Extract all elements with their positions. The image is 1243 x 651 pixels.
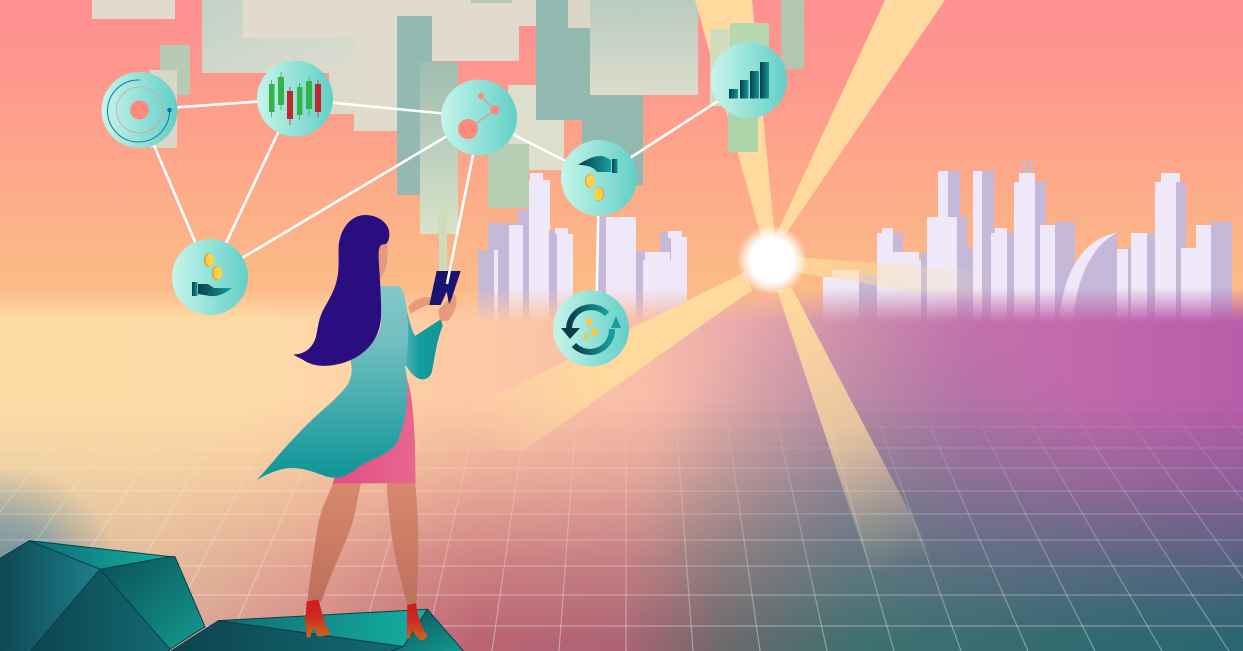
sleeve — [397, 293, 443, 379]
connector line from network node to phone — [447, 155, 473, 284]
light rays going upward from the sun — [695, 0, 945, 240]
left rock — [0, 541, 205, 651]
rock under her feet — [170, 609, 464, 651]
coat — [257, 286, 408, 480]
legs — [307, 482, 418, 607]
city skyline: right — [823, 160, 1232, 325]
city skyline: left — [478, 173, 687, 325]
blocks in front of the ray — [710, 23, 769, 152]
ray to the right across the city — [795, 257, 1000, 306]
background abstract blocks — [92, 0, 804, 275]
node: candlestick chart icon — [257, 60, 333, 136]
sky background — [0, 0, 1243, 340]
face — [378, 243, 387, 278]
node: share network icon — [441, 80, 517, 156]
ground gradient — [0, 280, 1243, 651]
node: hand dropping coins icon — [561, 140, 637, 216]
node: rising bar chart icon — [711, 42, 787, 118]
phone — [429, 271, 461, 305]
woman standing with phone — [257, 215, 461, 640]
shoes — [305, 599, 428, 640]
node: recycle coins icon — [553, 290, 629, 366]
network connector lines — [139, 81, 749, 329]
perspective grid floor — [0, 380, 1243, 651]
rocks in the foreground — [0, 541, 464, 651]
glowing sun — [737, 225, 807, 295]
pink dress — [333, 373, 416, 483]
hands — [408, 294, 456, 322]
hair — [293, 215, 389, 366]
node: orbit icon — [102, 72, 178, 148]
node: hand receiving coins icon — [172, 239, 248, 315]
light rays across the ground — [420, 272, 940, 570]
